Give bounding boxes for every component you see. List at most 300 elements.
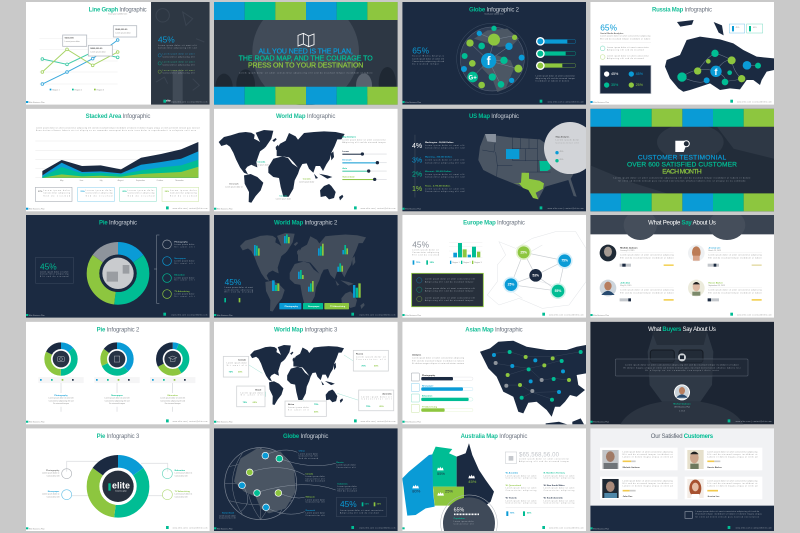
title: World Map Infographic 2 [274, 221, 338, 227]
map analysis text: 65% [560, 159, 564, 161]
stat text: 55% [365, 503, 369, 505]
map analysis text [342, 135, 386, 144]
dark text box: Lorem ipsum dolor sit amet consectetur elit [425, 278, 475, 281]
map icons [677, 50, 761, 85]
region text: W. Victoria [506, 497, 517, 500]
testimonial: john [600, 280, 674, 301]
panel texture [156, 9, 204, 104]
footer [590, 100, 772, 104]
list text: Wyoming - 300,000 Dollars [425, 157, 453, 159]
colour bands [214, 2, 398, 105]
map analysis text [555, 136, 579, 162]
footer: www.elite.com | contact@elite.com [737, 313, 772, 316]
slide: what people say [590, 215, 774, 318]
footer: www.elite.com | contact@elite.com [549, 527, 584, 530]
card text: Hassie Barber [707, 467, 722, 469]
amount: Adipiscing elit sed do eiusmod tempor [519, 460, 569, 463]
column text: Education [167, 394, 179, 397]
gender stats [506, 511, 531, 516]
stats box: 45% [636, 72, 644, 76]
side labels: Lorem ipsum dolor sit [175, 472, 193, 475]
us map [478, 134, 577, 199]
list items: Lorem ipsum dolor sit amet consectetur [607, 46, 649, 49]
stat text: Do eiusmod tempor [412, 63, 439, 66]
stat text: 35% [377, 503, 381, 505]
dark text box: Adipiscing elit sed do eiusmod tempor [425, 299, 474, 302]
map analysis text: Consectetur elit [556, 141, 579, 144]
callout text: 22% [122, 191, 127, 193]
band text: Lorem ipsum dolor sit amet consectetur adipiscing elit sed do [696, 510, 759, 513]
callout labels: $230,000 [65, 38, 74, 40]
slide: pie infographic [26, 215, 210, 318]
testimonial: hassie: Hassie Barber [708, 282, 723, 284]
connector lines [61, 383, 173, 412]
region labels: Malaysia [306, 497, 315, 499]
side labels [42, 469, 193, 498]
stat box [36, 257, 73, 283]
percent list: 1% [412, 186, 422, 193]
slide: satisfied customers [590, 428, 774, 531]
footer: www.elite.com | contact@elite.com [549, 313, 584, 316]
callout text: Lorem ipsum dolor [241, 392, 264, 394]
column text: Do eiusmod tempor [109, 402, 125, 405]
stat text [224, 286, 253, 302]
axis labels: May [60, 180, 64, 182]
callout text: 35% [238, 372, 242, 374]
stats box: 25% [636, 83, 644, 87]
column text: Do eiusmod tempor [165, 402, 181, 405]
testimonial: hassie [688, 280, 762, 301]
footer [214, 526, 396, 530]
callout text: Canada [238, 360, 247, 362]
headline: OVER 600 SATISFIED CUSTOMER [627, 162, 737, 169]
region text: Lorem ipsum dolor sit amet [544, 474, 575, 477]
icon circles [62, 469, 172, 500]
map labels: Denmark [229, 184, 239, 186]
region text: Lorem ipsum dolor sit amet [544, 499, 575, 502]
slide: globe infographic 2: Insert your subtitle here [484, 13, 504, 16]
world map [240, 233, 366, 312]
testimonial: hassie: Lorem ipsum dolor sit amet consectetur adipiscing [708, 289, 762, 292]
logo and contact: www.elite.com | contact@elite.com [171, 100, 208, 103]
list text: Consectetur adipiscing elit sed [425, 147, 464, 150]
progress bars: TV Advertising [422, 405, 438, 408]
stat text: Consectetur adipiscing [412, 251, 439, 254]
headline: EACH MONTH [662, 168, 702, 175]
stat text: Elit sed do eiusmod [225, 291, 253, 294]
testimonial: john: May 16, 2015 [620, 285, 631, 287]
title: Globe Infographic [283, 434, 328, 440]
region text: W. New South Wales [544, 484, 565, 487]
quote box: Et dolore magna aliqua ut enim ad minim veniam quis nostrud exercitation ullamco laboris nisi [624, 366, 741, 369]
legend: Region 1 [52, 89, 60, 91]
donut chart [93, 461, 143, 511]
quote box: Lorem ipsum dolor sit amet consectetur adipiscing elit sed do eiusmod tempor incididunt ut labore [625, 364, 739, 367]
testimonial: michale: Lorem ipsum dolor sit amet consectetur adipiscing [620, 254, 674, 257]
globe background [252, 0, 359, 105]
title: What People Say About Us [648, 220, 716, 226]
callout text: Lorem ipsum dolor [170, 190, 197, 192]
callout text: Lorem ipsum dolor [128, 190, 155, 192]
slide: globe infographic 2 [402, 2, 586, 105]
gender stat boxes: 65% [753, 27, 757, 29]
legends [38, 377, 195, 383]
sliders [342, 151, 387, 181]
headline [239, 48, 373, 69]
map labels: Canada [257, 162, 266, 164]
footer: Elite Business Plan [29, 421, 45, 424]
circle inset [441, 495, 497, 533]
side labels: Lorem ipsum dolor sit [42, 493, 60, 496]
social icons: G+ [469, 75, 477, 81]
callout labels: Lorem ipsum dolor [115, 32, 131, 34]
testimonial: michale: Michale Jackson [620, 247, 638, 249]
amount: Lorem ipsum dolor sit amet consectetur [519, 458, 569, 461]
footer: www.elite.com | contact@elite.com [359, 313, 396, 316]
list text: Newspaper [174, 258, 186, 260]
column text: Newspaper [111, 395, 123, 397]
list text: Missouri - 500,000 Dollars [425, 171, 452, 173]
percent list: 4% [412, 143, 422, 150]
region stats: 25% [445, 488, 453, 493]
panel text: Consectetur adipiscing elit [163, 72, 195, 75]
region labels: Consectetur elit [305, 477, 325, 480]
bar clusters [254, 234, 361, 298]
network lines [511, 252, 565, 291]
callout text: 65% [379, 406, 384, 408]
stat text: Lorem ipsum dolor sit amet consectetur adipiscing [600, 35, 650, 38]
slide: customer testimonial [590, 108, 774, 212]
social icons: f [487, 54, 492, 68]
map labels: Lorem ipsum dolor [299, 181, 315, 183]
footer: Elite Business Plan [29, 101, 45, 104]
stat text [600, 32, 651, 43]
card text [623, 450, 758, 498]
map analysis text: Map Analysis [342, 135, 357, 138]
name [673, 404, 691, 413]
callout text: Lorem ipsum dolor [288, 407, 309, 409]
callout labels: Lorem ipsum dolor [65, 41, 80, 43]
side labels: TV Advertising [175, 490, 191, 493]
gender stat boxes [729, 24, 763, 33]
callout boxes [223, 350, 394, 416]
list text: Sit amet elit [174, 295, 195, 298]
footer: www.elite.com | contact@elite.com [361, 420, 396, 423]
globe nodes [238, 452, 283, 511]
callout text: 31% [80, 191, 85, 193]
column text: Consectetur adipiscing elit sed [160, 399, 185, 402]
region labels: Lorem ipsum dolor [336, 465, 356, 467]
list items: Adipiscing elit sed do eiusmod [607, 48, 644, 51]
title: Australia Map Infographic [461, 434, 527, 440]
donut centre logo: elite [112, 480, 130, 490]
callout text: Sit amet elit [241, 394, 264, 397]
footer [26, 526, 208, 530]
region stats: 80% [412, 489, 421, 494]
region labels: Consectetur elit [306, 514, 326, 517]
region icons [412, 467, 475, 496]
footer: Elite Business Plan [29, 208, 45, 211]
stat text: Adipiscing elit sed do eiusmod [340, 511, 378, 514]
card text: Lorem ipsum dolor sit amet consectetur adipiscing [623, 479, 673, 482]
footer [590, 526, 772, 530]
axis labels: November [175, 180, 184, 182]
footer: www.elite.com | contact@elite.com [359, 527, 396, 530]
region labels: Consectetur elit [337, 487, 357, 490]
map analysis text: Map Analysis [556, 136, 570, 139]
footer: www.elite.com | contact@elite.com [173, 527, 208, 530]
region text: Lorem ipsum dolor sit amet [506, 487, 537, 490]
region labels: Lorem ipsum dolor [306, 499, 325, 501]
quote box [615, 359, 748, 376]
callout text: Consectetur adipiscing [86, 192, 112, 195]
legend buttons: Newspaper [308, 306, 320, 308]
panel text [158, 44, 197, 75]
map analysis text: Lorem ipsum dolor [556, 140, 579, 142]
donut centre logo [100, 468, 136, 504]
list text: Education [174, 274, 185, 277]
panel text: Lorem ipsum dolor sit amet elit [158, 44, 197, 47]
band text: Eiusmod tempor incididunt ut labore et dolore magna aliqua [696, 513, 763, 516]
region labels: Switzerland [222, 512, 235, 515]
region labels [219, 451, 357, 520]
region text: W. Australia [506, 472, 519, 475]
footer: Elite Business Plan [405, 421, 421, 424]
donut: newspaper [104, 346, 130, 372]
dark text box [412, 273, 483, 307]
people silhouettes [215, 67, 396, 100]
social icons [461, 26, 525, 88]
card text: Michale Jackson [623, 467, 640, 469]
region labels: Lorem ipsum dolor [337, 486, 357, 488]
region text: Consectetur adipiscing [544, 502, 574, 505]
card text: Labore et dolore magna aliqua ut enim ad [623, 456, 673, 459]
list text: Texas - 2,775,000 Dollars [425, 185, 451, 187]
callout text: Lorem ipsum dolor sit [361, 395, 392, 398]
stat text [40, 270, 69, 278]
map network [494, 352, 581, 399]
region text: W. South Australia [544, 497, 563, 500]
customer photos [602, 450, 704, 498]
gender stats: 65% [527, 513, 531, 515]
callout boxes [35, 187, 199, 201]
stat: 45%: 45% [340, 499, 357, 509]
caption: Lorem ipsum dolor sit amet consectetur adipiscing elit sed do eiusmod tempor incididunt ut labore [239, 71, 372, 74]
stat: 45%: 45% [412, 239, 430, 249]
logo and contact: elite [166, 100, 171, 103]
region text: Consectetur adipiscing [506, 502, 536, 505]
column text: Lorem ipsum dolor sit amet elit [49, 397, 74, 400]
testimonial: jessica: Lorem ipsum dolor sit amet consectetur adipiscing [708, 254, 762, 257]
column text: Photography [54, 394, 68, 397]
axis labels: July [99, 180, 103, 182]
testimonial: john: Lorem ipsum dolor sit amet consectetur adipiscing [620, 289, 674, 292]
region text: Lorem ipsum dolor sit amet [506, 474, 537, 477]
amount: $65,568,56.00 [519, 453, 560, 459]
sliders: Denmark [342, 160, 352, 162]
stats box: 35% [611, 83, 619, 87]
callout text: Lorem ipsum dolor [227, 363, 247, 365]
handshake background [590, 124, 774, 193]
stat text: Lorem ipsum dolor sit amet elit [412, 57, 444, 60]
region labels: Indonesia [337, 483, 348, 485]
axis labels [60, 179, 184, 182]
bracket [154, 235, 159, 303]
sliders: Lorem [342, 151, 349, 153]
list text: Consectetur adipiscing elit sed [425, 190, 464, 193]
region labels: Lorem ipsum dolor [219, 515, 236, 517]
card text: Lorem ipsum dolor sit amet consectetur adipiscing [623, 450, 673, 453]
callout text: Brazil [255, 389, 262, 391]
region labels: Sed do eiusmod [299, 458, 318, 460]
region labels: Consectetur elit [219, 517, 236, 520]
testimonial: michale [600, 245, 674, 267]
footer: www.elite.com | contact@elite.com [548, 207, 584, 210]
callout text: 75% [361, 366, 366, 368]
callout text: Sit amet elit [288, 408, 309, 411]
callout labels: Lorem ipsum dolor [90, 51, 106, 53]
region stats [412, 471, 477, 494]
legend buttons: TV Advertising [330, 305, 346, 308]
region labels: Lorem ipsum dolor [305, 476, 325, 478]
callout text: Lorem ipsum dolor [86, 190, 113, 192]
icon: testimonial [675, 141, 689, 152]
globe [225, 448, 297, 520]
axis labels: August [118, 179, 124, 182]
headline: ALL YOU NEED IS THE PLAN, [259, 48, 353, 55]
bar chart: Region 1 [452, 262, 460, 264]
world map [250, 345, 344, 405]
column text: Lorem ipsum dolor sit amet elit [160, 397, 186, 400]
analysis circle [544, 122, 596, 174]
callout text: Africa [288, 403, 295, 406]
slide: russia map [590, 2, 774, 105]
list text: Lorem ipsum dolor [174, 244, 195, 246]
callout text: Russia [356, 354, 364, 356]
column text: Do eiusmod tempor [53, 402, 69, 405]
region text [506, 472, 575, 508]
testimonial: john: John Doe [620, 282, 631, 284]
callout text: 27% [38, 191, 42, 193]
list text: Washington - 50,000 Dollars [425, 141, 454, 144]
stat box [336, 497, 386, 517]
slide: line graph [26, 2, 210, 105]
connectors [249, 355, 358, 402]
list icons [163, 240, 171, 298]
progress bars: Newspaper [422, 385, 434, 387]
side labels: Consectetur elit [47, 474, 60, 477]
callout text: Sed do eiusmod [86, 195, 112, 197]
list text: Lorem ipsum dolor [174, 261, 195, 263]
dark text box: Adipiscing elit sed do eiusmod tempor [425, 280, 474, 283]
sliders: Asia [342, 167, 348, 170]
progress bars: Photography [422, 374, 436, 377]
legend: Region 3 [97, 89, 104, 91]
column text: Lorem ipsum dolor sit amet elit [105, 397, 130, 400]
region labels: Lorem ipsum dolor [306, 513, 325, 515]
map labels: Lorem ipsum dolor [254, 164, 269, 166]
footer: Elite Business Plan [593, 101, 609, 104]
panel text: Lorem ipsum dolor sit amet [163, 53, 195, 56]
region text: Consectetur adipiscing [544, 489, 574, 492]
icon: map [298, 33, 314, 47]
slide: world map 3 [214, 322, 398, 424]
footer [402, 421, 421, 424]
bars caption: Incididunt ut labore et dolore [536, 79, 569, 82]
analysis text: Elit sed do eiusmod tempor incididunt ut labore [412, 359, 464, 362]
analysis text: Lorem ipsum dolor sit amet consectetur adipiscing [412, 357, 464, 360]
footer [590, 313, 772, 317]
network nodes: 25% [520, 250, 527, 254]
stat text: Elit sed do eiusmod [412, 254, 439, 257]
title: World Map Infographic [276, 114, 335, 120]
donut: photography [48, 346, 74, 372]
panel text: Consectetur adipiscing elit [163, 55, 195, 58]
stat text [412, 248, 439, 265]
inset text [454, 508, 479, 526]
testimonial: jessica: March 23, 2015 [708, 250, 721, 252]
callout text: 75% [314, 404, 318, 406]
region labels: Sed do eiusmod [337, 491, 357, 493]
card text: Lorem ipsum dolor sit amet consectetur adipiscing [707, 450, 757, 453]
card text: Elit sed do eiusmod tempor incididunt ut [707, 482, 758, 485]
region text: N. Northern Territory [544, 472, 566, 475]
callouts [63, 26, 137, 56]
callout text: 75% [243, 402, 247, 404]
stat text: Lorem ipsum dolor sit amet [40, 270, 69, 273]
slide: us map [402, 108, 586, 212]
list text: Sit amet elit [174, 262, 195, 265]
intro text [36, 126, 199, 132]
card text: Elit sed do eiusmod tempor incididunt ut [623, 453, 673, 456]
band text [685, 510, 763, 518]
slide: world map 2 [214, 215, 398, 318]
list items: Lorem ipsum dolor sit amet consectetur [607, 55, 649, 58]
list items: Adipiscing elit sed do eiusmod [607, 57, 644, 60]
percent list [412, 143, 422, 193]
footer: Elite Business Plan [217, 527, 233, 530]
title: Asian Map Infographic [465, 327, 523, 333]
region labels: Lorem ipsum dolor [299, 453, 318, 455]
region text: Consectetur adipiscing [506, 489, 536, 492]
card text: Labore et dolore magna aliqua ut enim ad [707, 456, 757, 459]
testimonial: hassie: September 09, 2015 [708, 284, 725, 287]
header band [590, 210, 774, 240]
region stats: 55% [437, 471, 445, 476]
percent list: 3% [412, 157, 422, 164]
footer: Elite Business Plan [29, 314, 45, 317]
inset text: Consectetur elit [454, 523, 474, 526]
slide: pie infographic 3 [26, 428, 210, 531]
title: Stacked Area Infographic [86, 114, 150, 120]
legend [50, 89, 104, 91]
card text: Lorem ipsum dolor sit amet consectetur adipiscing [707, 479, 757, 482]
bar chart: Region 3 [474, 262, 482, 264]
map pins [492, 350, 583, 402]
legend buttons [279, 303, 349, 309]
globe [457, 23, 528, 95]
list text: TV Advertising [174, 290, 190, 293]
footer: Elite Business Plan [405, 314, 421, 317]
footer: www.elite.com | contact@elite.com [736, 527, 772, 530]
side labels: Education [175, 469, 186, 472]
stat: 45%: 45% [40, 261, 57, 271]
map labels: Canada [279, 196, 288, 198]
title: Pie Infographic 2 [97, 327, 140, 333]
callout text: Consectetur adipiscing [170, 192, 197, 195]
dark text box: Adipiscing elit sed do eiusmod tempor [425, 290, 474, 293]
footer [590, 419, 772, 424]
